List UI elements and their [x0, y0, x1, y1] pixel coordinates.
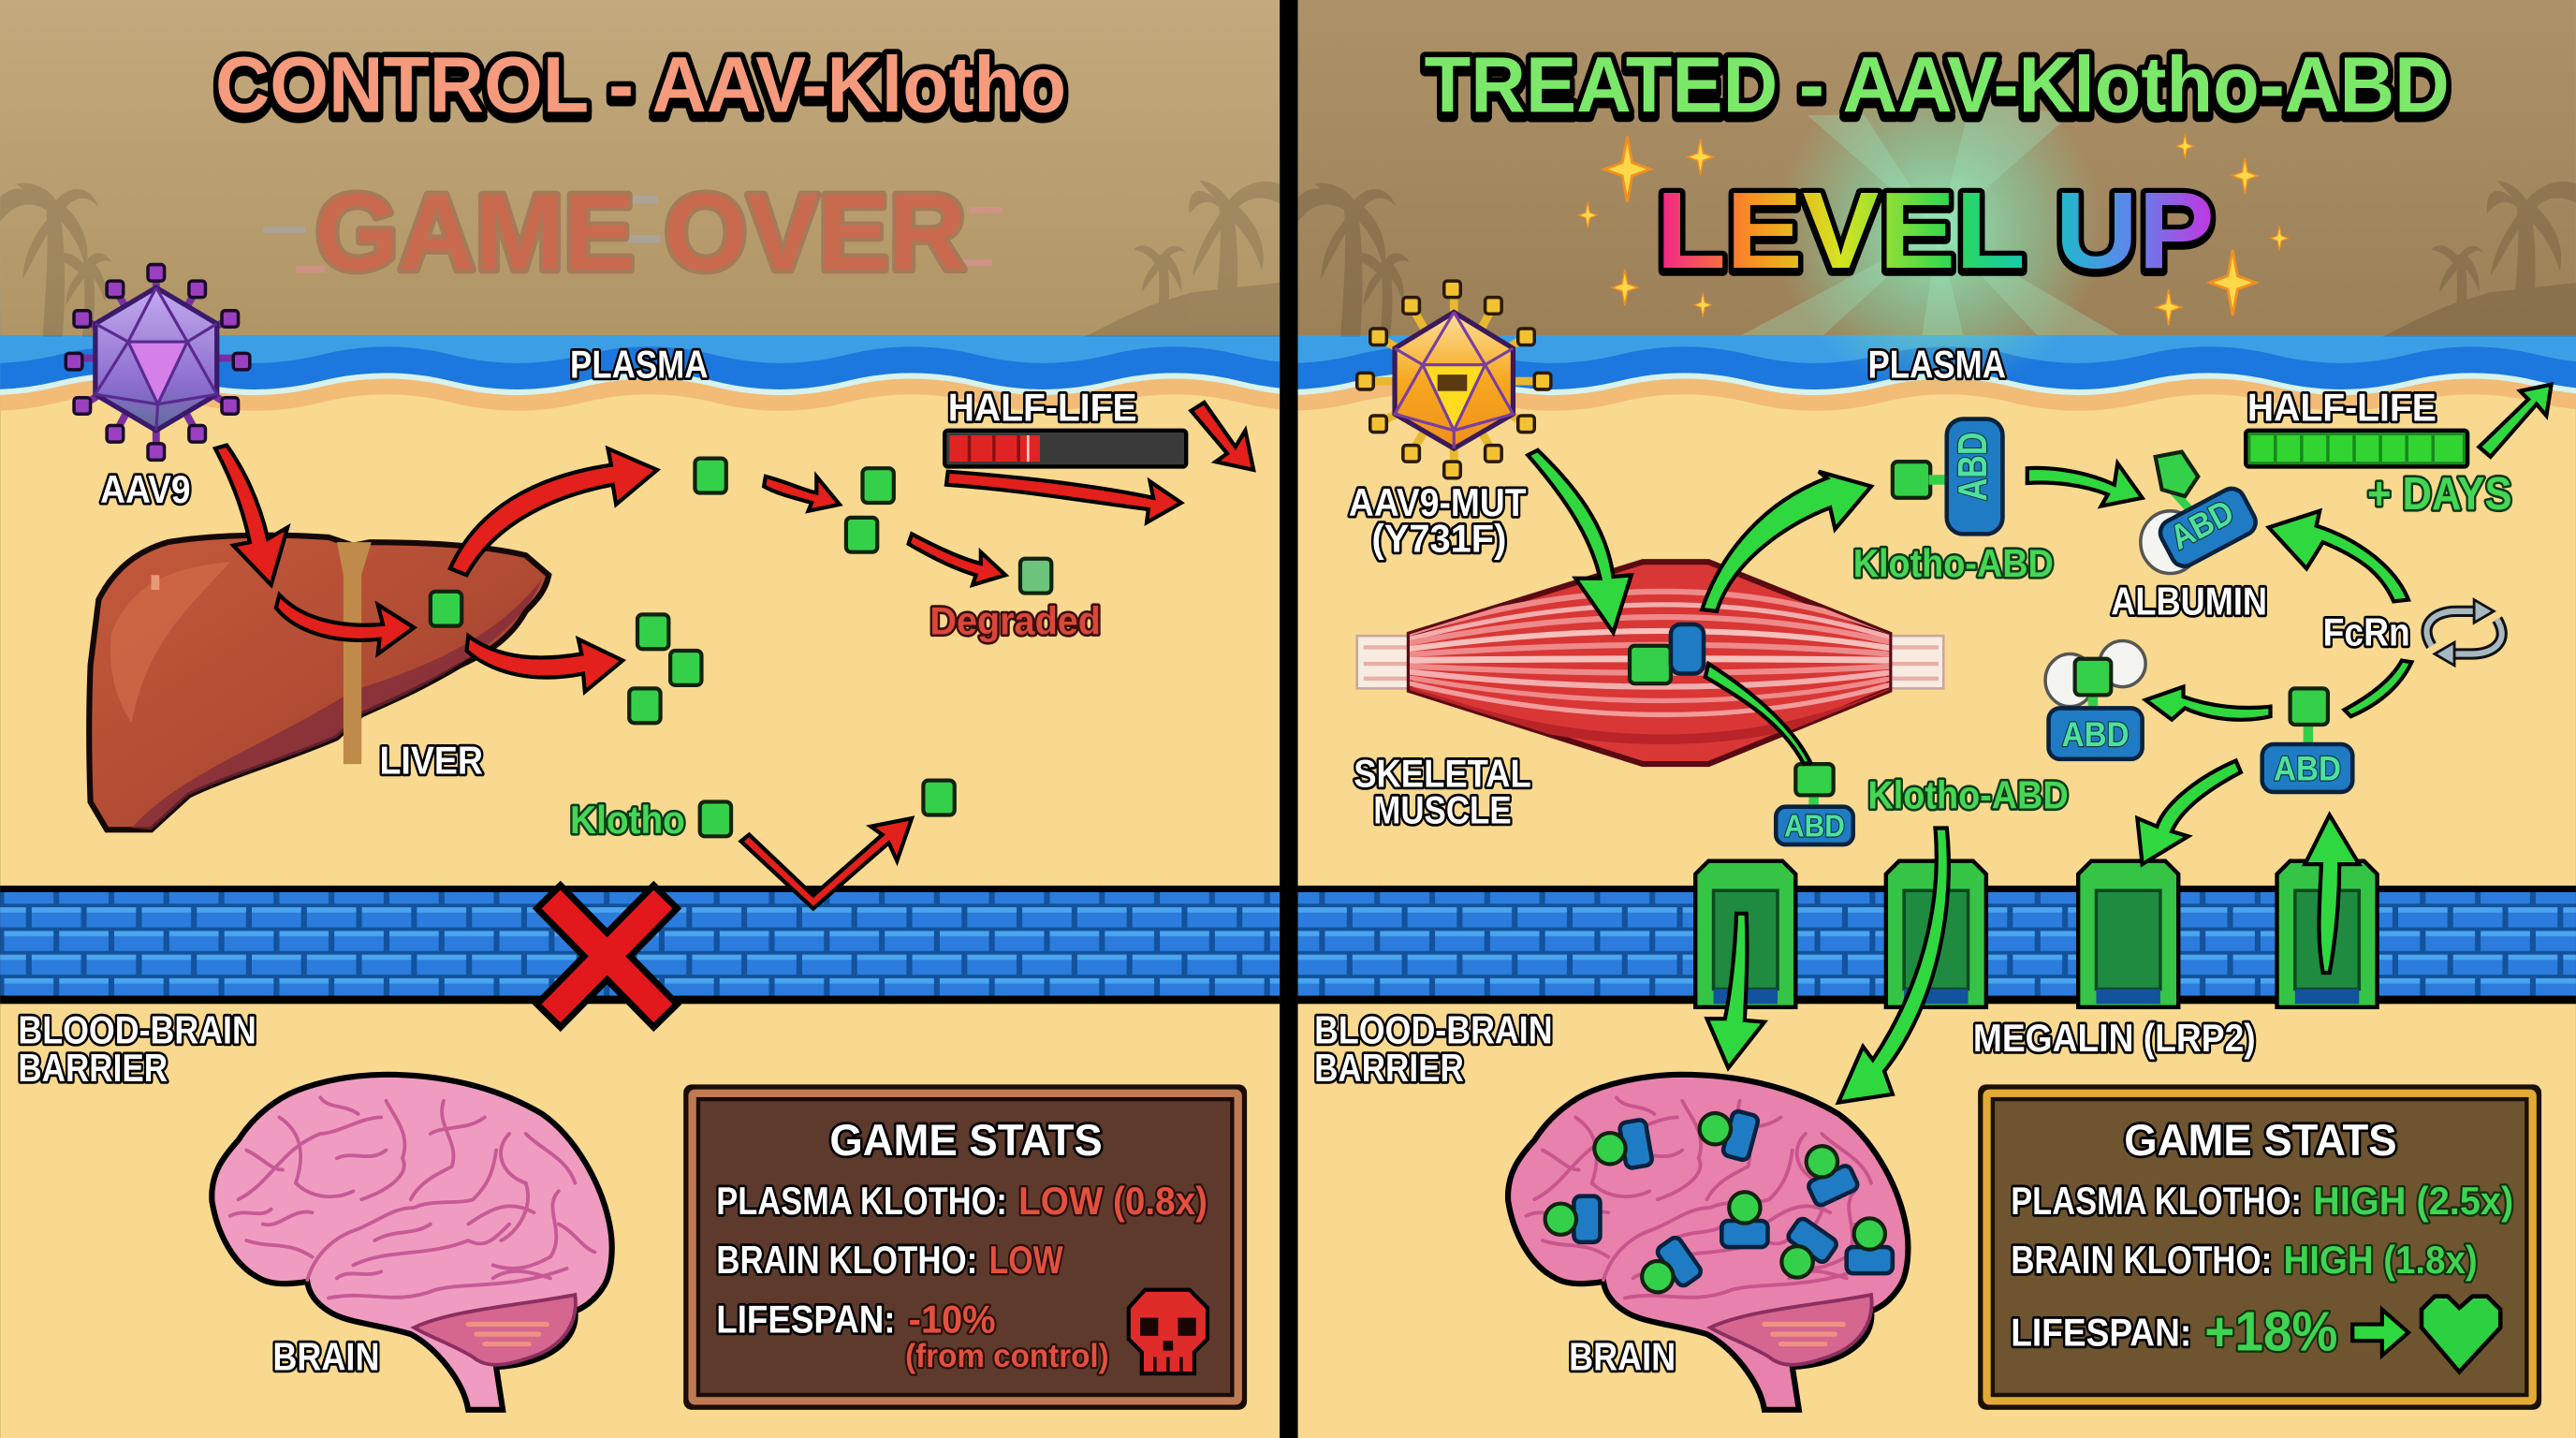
arrow: up through megalin — [2305, 814, 2359, 973]
label: albumin: ALBUMIN — [2111, 579, 2267, 623]
label: blood-brain barrier: BARRIER — [1314, 1046, 1464, 1090]
arrow: deflected at barrier — [741, 818, 912, 909]
stat: lifespan: +18% — [2204, 1300, 2337, 1363]
game over banner: GAME OVER — [315, 171, 966, 293]
label: blood-brain barrier — [1314, 1007, 1553, 1090]
game over banner — [262, 189, 1002, 275]
arrow: down through megalin — [1707, 914, 1764, 1068]
label: AAV9-MUT Y731F: AAV9-MUT — [1349, 480, 1527, 524]
ocean: plasma — [1224, 286, 2576, 411]
arrow: FcRn to albumin — [2269, 511, 2408, 601]
label: plasma: PLASMA — [1868, 343, 2006, 387]
arrow: to megalin — [2137, 761, 2241, 864]
recycled ABD construct — [2262, 688, 2352, 792]
level up banner: LEVEL UP — [1656, 169, 2215, 291]
stat: brain klotho: LOW — [989, 1238, 1063, 1282]
label: skeletal muscle: SKELETAL — [1354, 752, 1531, 796]
arrow: to degraded — [909, 534, 1005, 585]
palm silhouettes — [0, 181, 1280, 337]
stat: brain klotho: BRAIN KLOTHO: — [2011, 1238, 2272, 1282]
arrow: half-life up — [2479, 385, 2552, 457]
label: plus days: + DAYS — [2367, 469, 2511, 520]
klotho-ABD plasma construct: ABD — [1950, 433, 1996, 501]
stat: lifespan — [716, 1297, 1109, 1374]
arrow: secreted klotho — [466, 636, 622, 692]
brain organ with klotho-ABD — [1508, 1075, 1908, 1410]
palm silhouettes — [1298, 181, 2576, 337]
level up glow rays — [1741, 66, 2119, 394]
label: skeletal muscle: MUSCLE — [1373, 787, 1512, 831]
arrow: to white blob ABD — [2145, 687, 2271, 720]
stat: brain klotho: HIGH (1.8x) — [2284, 1238, 2478, 1282]
arrow: half-life down — [1191, 403, 1253, 470]
label: klotho: Klotho — [570, 798, 685, 842]
title: control: CONTROL - AAV-Klotho — [215, 40, 1066, 128]
stat: lifespan: -10% — [909, 1297, 996, 1341]
arrow: FcRn recycle arc — [2344, 661, 2411, 716]
label: skeletal muscle — [1354, 752, 1531, 831]
label: megalin: MEGALIN (LRP2) — [1973, 1016, 2256, 1060]
stat: lifespan: LIFESPAN: — [716, 1297, 896, 1341]
arrow: lifespan to heart — [2352, 1310, 2408, 1356]
klotho-ABD particles in brain — [1545, 1103, 1893, 1304]
klotho-ABD in muscle — [1630, 624, 1704, 683]
panel: game stats control — [683, 1084, 1247, 1410]
label: AAV9-MUT Y731F: (Y731F) — [1372, 517, 1506, 561]
transcytosed ABD construct: ABD — [1784, 809, 1845, 844]
recycled ABD construct: ABD — [2274, 750, 2341, 788]
albumin bound construct — [2141, 452, 2261, 574]
stat: brain klotho — [716, 1243, 1065, 1277]
divider between panels — [1280, 0, 1298, 1438]
arrow: capsid to liver — [215, 446, 287, 585]
half-life bar: high — [2246, 431, 2467, 466]
label: half-life: HALF-LIFE — [2247, 385, 2437, 429]
arrow: half-life drop — [946, 472, 1181, 522]
stat: brain klotho: BRAIN KLOTHO: — [716, 1238, 977, 1282]
blood-brain barrier wall — [1298, 886, 2576, 1004]
label: half-life: HALF-LIFE — [948, 385, 1137, 429]
ocean: plasma — [0, 286, 1372, 411]
blood-brain barrier wall — [0, 886, 1281, 1004]
label: blood-brain barrier: BARRIER — [18, 1046, 168, 1090]
label: AAV9: AAV9 — [100, 467, 191, 511]
label: brain: BRAIN — [1569, 1335, 1676, 1379]
stat: plasma klotho: PLASMA KLOTHO: — [716, 1179, 1007, 1223]
arrow: klotho-ABD to brain — [1838, 829, 1949, 1103]
stat: brain klotho — [2011, 1238, 2478, 1282]
stat: lifespan — [2011, 1300, 2337, 1363]
stat: lifespan: LIFESPAN: — [2011, 1310, 2191, 1354]
label: FcRn: FcRn — [2323, 610, 2410, 654]
icon: AAV9-MUT capsid — [1357, 281, 1551, 478]
arrow: plasma step — [764, 477, 840, 511]
label: plasma: PLASMA — [570, 343, 708, 387]
arrow: liver to plasma — [450, 448, 657, 575]
transcytosed ABD construct — [1776, 764, 1853, 844]
icon: AAV9 capsid — [66, 265, 250, 460]
half-life bar: low — [944, 431, 1186, 466]
arrow: construct to albumin — [2027, 463, 2143, 506]
klotho protein squares — [431, 459, 1051, 836]
label: klotho-ABD: Klotho-ABD — [1853, 541, 2054, 585]
arrow: muscle to plasma — [1702, 472, 1871, 611]
stat: lifespan: (from control) — [905, 1338, 1109, 1374]
brain organ — [212, 1075, 612, 1410]
arrow: into hepatocyte — [276, 594, 414, 654]
sky — [0, 0, 1281, 335]
stat: plasma klotho: LOW (0.8x) — [1018, 1179, 1208, 1223]
icon: skull — [1129, 1290, 1208, 1373]
sparkles — [1578, 134, 2288, 325]
panel: treated — [1224, 0, 2576, 1438]
stats heading: GAME STATS — [2124, 1116, 2397, 1166]
label: klotho-ABD lower: Klotho-ABD — [1868, 772, 2069, 816]
sky — [1298, 0, 2576, 335]
label: AAV9-MUT Y731F — [1349, 480, 1527, 561]
stats heading: GAME STATS — [829, 1116, 1103, 1166]
liver organ — [89, 536, 549, 829]
stat: plasma klotho: PLASMA KLOTHO: — [2011, 1179, 2302, 1223]
label: blood-brain barrier — [18, 1013, 256, 1084]
label: blood-brain barrier: BLOOD-BRAIN — [18, 1007, 256, 1051]
klotho-ABD plasma construct — [1893, 419, 2002, 534]
panel: game stats treated — [1978, 1084, 2541, 1410]
arrow: muscle to construct — [1705, 664, 1810, 764]
label: liver: LIVER — [379, 739, 483, 783]
label: blood-brain barrier: BLOOD-BRAIN — [1314, 1007, 1553, 1051]
stat: plasma klotho: HIGH (2.5x) — [2313, 1179, 2513, 1223]
label: brain: BRAIN — [272, 1335, 379, 1379]
albumin-free ABD with white blob — [2045, 640, 2145, 759]
icon: blocked X — [561, 909, 654, 1004]
megalin channels — [1695, 861, 2378, 1007]
title: treated: TREATED - AAV-Klotho-ABD — [1425, 40, 2450, 128]
icon: FcRn recycling — [2426, 600, 2502, 666]
albumin-free ABD with white blob: ABD — [2062, 715, 2130, 754]
skeletal muscle organ — [1357, 562, 1943, 764]
icon: heart — [2422, 1297, 2500, 1372]
panel: control — [0, 0, 1372, 1438]
albumin bound construct: ABD — [2164, 492, 2240, 557]
label: degraded: Degraded — [929, 598, 1101, 642]
arrow: capsid to muscle — [1528, 450, 1632, 633]
